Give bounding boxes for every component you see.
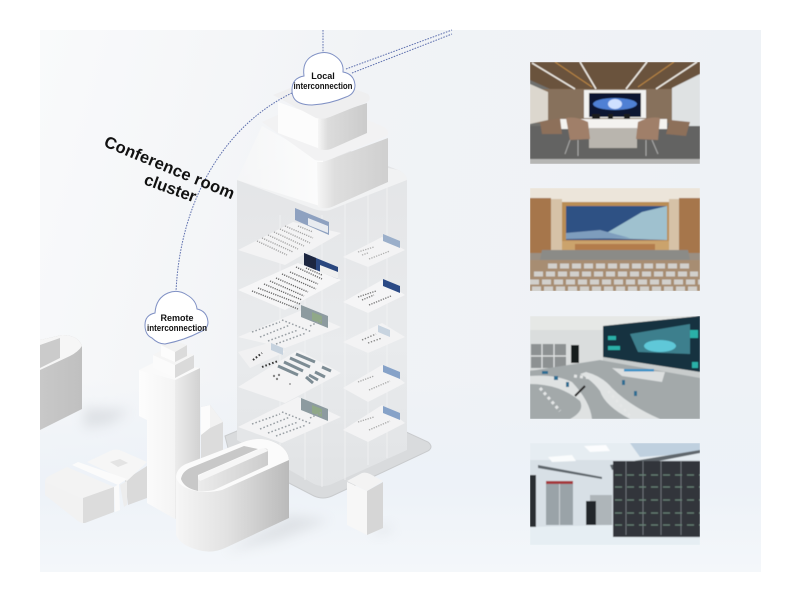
floor 1 seating xyxy=(257,226,313,255)
floor 4 small seats xyxy=(273,374,291,385)
left floor 5 xyxy=(238,397,341,443)
skyscraper xyxy=(139,340,200,519)
left floor 4 xyxy=(238,342,341,403)
heading: conference room cluster: Conference room xyxy=(101,133,237,203)
small block building xyxy=(347,473,383,535)
tower roof xyxy=(237,150,407,211)
heading: conference room cluster: cluster xyxy=(142,171,199,206)
left edge building xyxy=(40,335,82,430)
floor 5 screen xyxy=(301,398,328,421)
left floor 2 xyxy=(238,253,341,310)
cloud: local interconnection: Local xyxy=(311,71,335,81)
front block xyxy=(45,467,114,498)
spire building xyxy=(201,405,223,465)
left floor 3 xyxy=(238,305,341,348)
floor 1 screen xyxy=(295,208,329,235)
floor 3 tables xyxy=(252,320,322,344)
photo: control room xyxy=(530,316,700,419)
floor 5 tables xyxy=(252,412,322,436)
base plate xyxy=(225,396,431,498)
floor 4 desk rows xyxy=(278,354,331,383)
low flat building xyxy=(45,450,147,523)
photo: auditorium xyxy=(530,188,700,291)
large stadium building xyxy=(176,439,289,552)
left floor 1 xyxy=(238,208,341,265)
right floor 5 xyxy=(343,405,405,442)
top tier block xyxy=(273,76,370,150)
cloud: remote interconnection: interconnection xyxy=(147,323,207,333)
dotted connection lines xyxy=(176,30,452,292)
photo: server room xyxy=(530,443,700,544)
photo: conference room xyxy=(530,62,700,164)
cloud: remote interconnection xyxy=(145,291,208,344)
floor 4 screen xyxy=(271,343,283,355)
floor 2 screen xyxy=(304,253,338,279)
cloud: local interconnection: interconnection xyxy=(294,81,352,91)
floor 3 screen xyxy=(301,305,328,328)
right floor 1 xyxy=(343,234,405,267)
upper tier block xyxy=(237,98,388,208)
ground shadows xyxy=(84,408,395,552)
floor 2 seating xyxy=(252,267,322,309)
tower glass body xyxy=(237,140,407,486)
right floor 4 xyxy=(343,365,405,402)
right floor 3 xyxy=(343,323,405,353)
cloud: local interconnection xyxy=(292,52,355,105)
divider strip xyxy=(72,462,127,485)
cloud: remote interconnection: Remote xyxy=(160,313,194,323)
right floor 2 xyxy=(343,279,405,313)
floor 4 meeting table xyxy=(253,353,278,367)
rear block xyxy=(125,466,147,505)
main tower xyxy=(237,76,407,487)
